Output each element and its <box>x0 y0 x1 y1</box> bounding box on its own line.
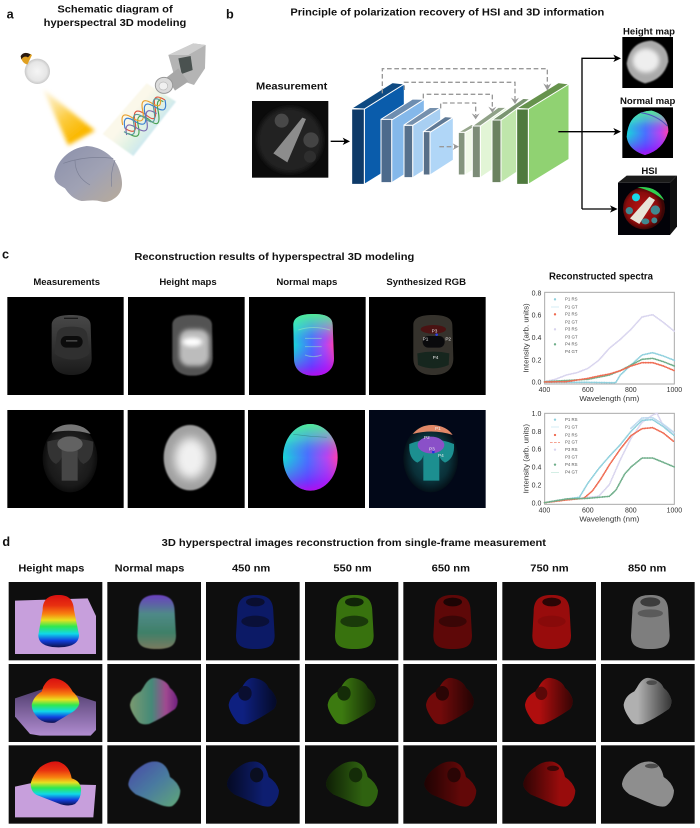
chart legend: P2 RS <box>565 312 578 317</box>
spectral beam <box>103 83 176 156</box>
encoder blocks <box>352 83 453 184</box>
height map row 3 <box>15 761 96 817</box>
height map row 2 <box>15 678 96 736</box>
line chart: top spectra <box>524 290 682 403</box>
line chart: bottom spectra: 800 <box>625 507 637 514</box>
column headers: 450 nm <box>232 563 270 574</box>
line chart: top spectra: Intensity (arb. units) <box>524 303 531 373</box>
heading: principle: Principle of polarization recovery of HSI and 3D information <box>290 8 604 19</box>
height map image <box>622 37 673 88</box>
chart legend: P1 RS <box>565 417 578 422</box>
chart legend: P3 RS <box>565 327 578 332</box>
column headers: Normal maps <box>276 277 337 287</box>
450 nm column <box>227 595 279 807</box>
row 1 height map <box>128 297 245 395</box>
normal map label: Normal map <box>620 96 676 106</box>
chart legend: P3 GT <box>565 334 578 339</box>
column headers: Height maps <box>18 563 85 574</box>
panel label c: c <box>2 247 9 261</box>
row 2 synthesized RGB: P3 <box>429 446 435 451</box>
line chart: bottom spectra: 400 <box>539 507 550 514</box>
panel c: reconstruction results <box>2 247 486 508</box>
line chart: bottom spectra: 0.0 <box>532 500 541 507</box>
icon: light bulb <box>21 53 50 84</box>
height map label: Height map <box>623 27 676 37</box>
line chart: top spectra: 800 <box>625 387 637 394</box>
panel c: reconstructed spectra <box>524 271 682 523</box>
column headers: Measurements <box>33 277 100 287</box>
icon: camera <box>155 43 206 93</box>
650 nm column <box>424 595 476 807</box>
height map row 1 <box>15 595 96 654</box>
column headers <box>18 563 666 574</box>
column headers: Synthesized RGB <box>386 277 466 287</box>
line chart: bottom spectra: 600 <box>582 507 594 514</box>
panel label a: a <box>7 8 15 22</box>
heading: schematic diagram: hyperspectral 3D modeling <box>44 18 186 29</box>
line chart: top spectra: 0.0 <box>532 380 541 387</box>
750 nm column <box>523 595 575 807</box>
column headers: 550 nm <box>333 563 372 574</box>
chart legend: P2 GT <box>565 319 578 324</box>
row 1 normal map <box>249 297 366 395</box>
panel a: schematic diagram <box>7 5 206 202</box>
line chart: top spectra: 0.4 <box>532 335 541 342</box>
line chart: top spectra: Wavelength (nm) <box>579 396 639 403</box>
row 1 synthesized RGB: P2 <box>445 337 451 342</box>
heading: schematic diagram <box>44 5 186 29</box>
chart legend: P4 RS <box>565 342 578 347</box>
measurement image <box>252 101 328 178</box>
chart legend <box>551 297 578 354</box>
row 2 height map <box>128 410 245 508</box>
row 2 normal map <box>248 410 365 508</box>
line chart: bottom spectra: 0.8 <box>532 429 541 436</box>
row 1 synthesized RGB <box>369 297 486 395</box>
column headers: 750 nm <box>530 563 569 574</box>
panel label b: b <box>226 8 234 22</box>
chart legend: P1 GT <box>565 304 578 309</box>
chart legend: P1 GT <box>565 424 578 429</box>
row 2 synthesized RGB <box>369 410 486 508</box>
chart legend: P1 RS <box>565 297 578 302</box>
row 2 synthesized RGB: P1 <box>435 426 441 431</box>
3D object <box>54 146 122 202</box>
line chart: bottom spectra: 1000 <box>667 507 682 514</box>
column headers <box>33 277 466 287</box>
row 2 synthesized RGB: P4 <box>438 453 444 458</box>
line chart: top spectra: 1000 <box>667 387 682 394</box>
chart legend: P4 GT <box>565 470 578 475</box>
line chart: bottom spectra: Wavelength (nm) <box>579 516 639 523</box>
line chart: bottom spectra <box>524 411 682 523</box>
output arrowheads <box>610 55 621 213</box>
row 2 synthesized RGB: P2 <box>424 435 430 440</box>
skip connections <box>382 69 547 147</box>
chart legend: P4 RS <box>565 462 578 467</box>
line chart: top spectra: 600 <box>582 387 594 394</box>
skip connection arrowheads <box>453 83 551 150</box>
row 1 synthesized RGB: P3 <box>432 328 438 333</box>
chart legend: P3 RS <box>565 447 578 452</box>
measurement label: Measurement <box>256 81 328 92</box>
line chart: top spectra: 400 <box>539 387 550 394</box>
HSI label: HSI <box>641 166 657 176</box>
decoder blocks <box>458 83 569 184</box>
heading: single-frame reconstruction: 3D hyperspectral images reconstruction from single-frame measurement <box>162 538 547 549</box>
panel d: 3D hyperspectral images <box>2 535 695 824</box>
column headers: 850 nm <box>628 563 666 574</box>
chart legend: P3 GT <box>565 454 578 459</box>
column headers: Normal maps <box>115 563 185 574</box>
HSI cube <box>618 176 677 235</box>
normal map image <box>622 107 673 158</box>
chart legend: P2 GT <box>565 440 578 445</box>
chart legend: P2 RS <box>565 432 578 437</box>
line chart: top spectra: 0.2 <box>532 357 541 364</box>
550 nm column <box>326 595 378 807</box>
row 1 synthesized RGB: P4 <box>433 355 439 360</box>
light cone <box>43 89 95 145</box>
row 1 synthesized RGB: P1 <box>423 336 429 341</box>
panel label d: d <box>2 535 10 549</box>
row 2 measurement <box>7 410 124 508</box>
normal maps <box>128 595 180 807</box>
column headers: 650 nm <box>432 563 470 574</box>
line chart: bottom spectra: 0.2 <box>532 482 541 489</box>
arrow: into network <box>331 138 350 145</box>
output arrows <box>558 58 617 209</box>
row 1 measurement <box>7 297 124 395</box>
line chart: bottom spectra: 0.6 <box>532 447 541 454</box>
heading: schematic diagram: Schematic diagram of <box>57 5 173 16</box>
tile backgrounds <box>9 582 695 824</box>
line chart: bottom spectra: 0.4 <box>532 465 541 472</box>
chart legend <box>550 417 578 475</box>
line chart: top spectra: 0.6 <box>532 313 541 320</box>
spectra heading: Reconstructed spectra <box>549 271 654 282</box>
line chart: bottom spectra: Intensity (arb. units) <box>524 424 531 493</box>
column headers: Height maps <box>159 277 217 287</box>
850 nm column <box>622 595 674 807</box>
spectral waves <box>122 97 166 136</box>
line chart: top spectra: 0.8 <box>532 290 541 297</box>
chart legend: P4 GT <box>565 349 578 354</box>
heading: reconstruction results: Reconstruction results of hyperspectral 3D modeling <box>134 252 414 263</box>
line chart: bottom spectra: 1.0 <box>532 411 541 418</box>
panel b: polarization recovery network <box>226 8 677 235</box>
